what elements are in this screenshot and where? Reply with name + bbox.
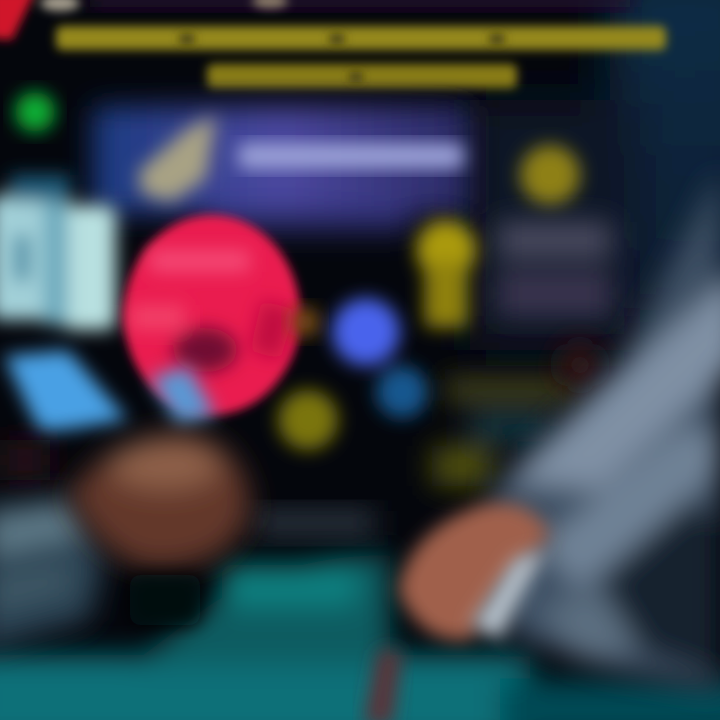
title line bars — [56, 26, 666, 88]
icon: top left red corner — [0, 0, 288, 40]
icon: dim yellow circle — [278, 390, 338, 450]
left sleeve — [0, 495, 105, 650]
red thin stem — [364, 650, 402, 720]
blue parallelogram — [4, 350, 128, 434]
right sleeve — [490, 170, 720, 690]
red circle texture — [130, 250, 295, 372]
panel: blue purple banner — [92, 106, 470, 233]
red circle chart — [124, 215, 300, 415]
grey text block — [497, 222, 612, 316]
banner text bar — [238, 143, 464, 169]
icon: yellow circle — [520, 145, 580, 205]
dark object — [130, 575, 200, 625]
icon: beige hand — [138, 116, 216, 202]
top right dark blue wall — [470, 0, 720, 350]
top edge strip — [90, 0, 630, 8]
dark red accent — [0, 343, 602, 480]
small blue tile — [150, 366, 216, 426]
olive text bars — [432, 378, 575, 486]
right hand — [398, 503, 550, 640]
icon: yellow figure — [416, 220, 476, 328]
icon: blue circles — [332, 298, 428, 418]
teal floor — [0, 555, 720, 720]
left hand — [68, 432, 250, 568]
grey band above floor — [255, 510, 375, 536]
orange accent — [290, 307, 320, 337]
white cuff — [470, 550, 545, 640]
title texture — [180, 34, 504, 82]
icon: green dot — [15, 92, 55, 132]
big light numerals — [0, 175, 116, 330]
